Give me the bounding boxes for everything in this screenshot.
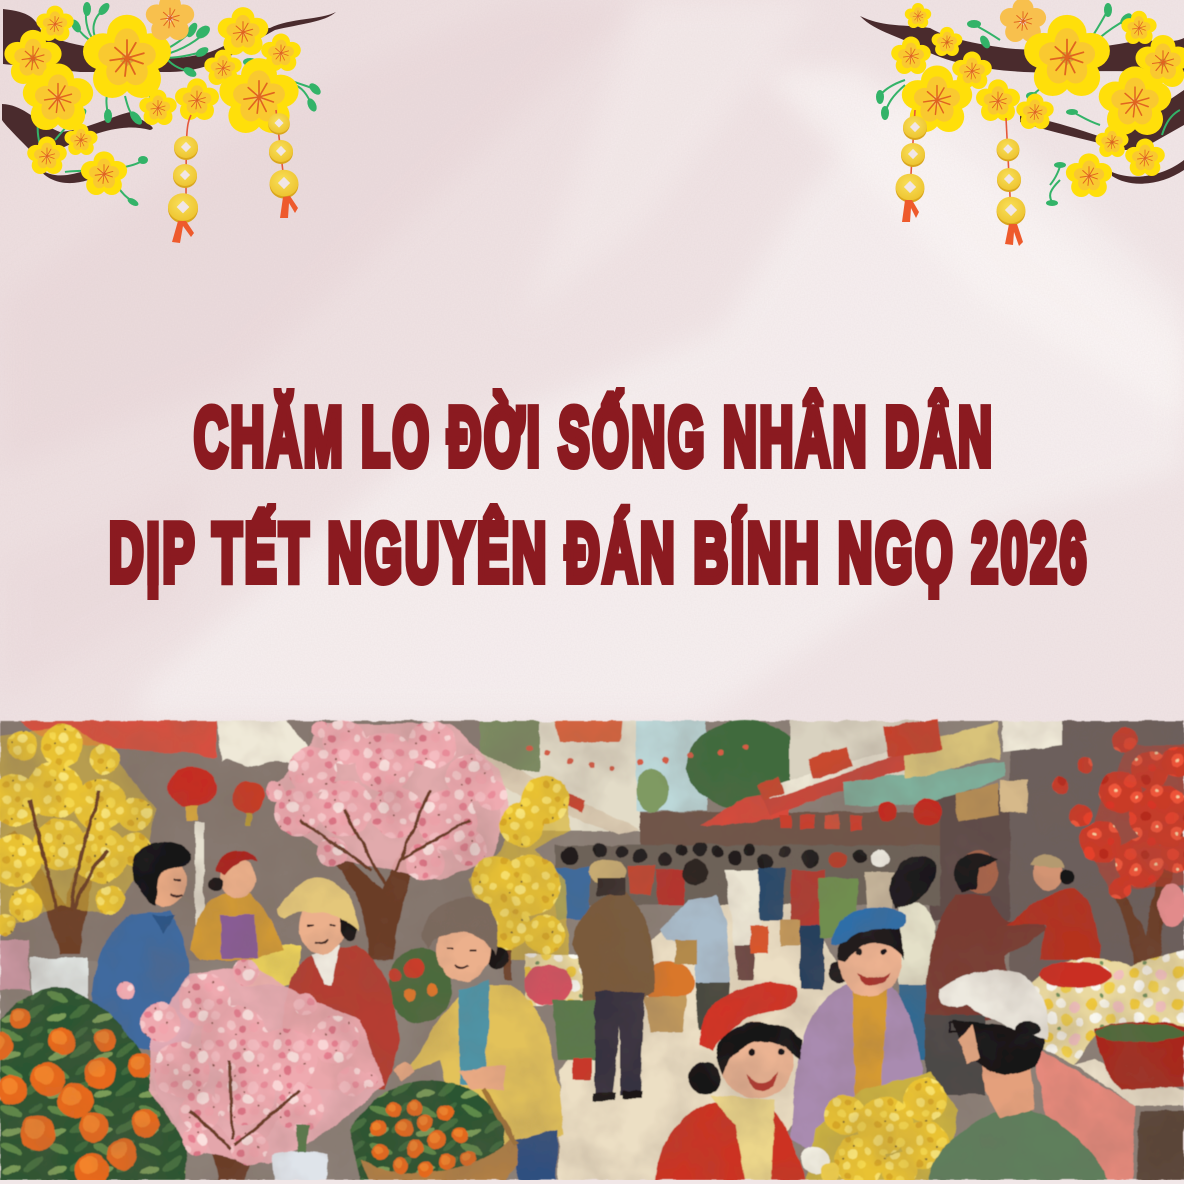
figure: man with white cap seen from behind	[928, 970, 1108, 1180]
pink peach tree centre	[265, 720, 510, 960]
distant lanterns and stalls	[470, 745, 748, 835]
yellow apricot tree centre right	[468, 776, 570, 980]
left awnings	[20, 721, 320, 925]
figure: woman with straw hat and red jacket	[277, 877, 400, 1090]
figure: girl with red beret	[655, 983, 805, 1180]
figure: person in light blue shirt	[660, 859, 730, 1030]
figure: woman in yellow jacket	[392, 898, 565, 1180]
green buds	[38, 8, 315, 202]
figure: man in blue shirt	[92, 842, 195, 1060]
title line 1: CHĂM LO ĐỜI SỐNG NHÂN DÂN	[194, 390, 995, 483]
title	[109, 390, 1089, 599]
right shop awnings and signs	[700, 719, 1062, 831]
title line 2: DỊP TẾT NGUYÊN ĐÁN BÍNH NGỌ 2026	[109, 505, 1089, 599]
crowd	[555, 843, 940, 990]
figure: man in brown jacket seen from behind	[572, 859, 655, 1101]
flower stall right	[1020, 950, 1184, 1180]
figure: woman in pale shirt and jeans	[890, 856, 936, 1060]
street and pavement	[558, 900, 860, 1180]
red peach tree right	[1052, 727, 1184, 1030]
red lanterns	[168, 767, 264, 826]
figure: vendor with red headscarf	[190, 851, 285, 960]
figure: man in maroon jacket	[925, 850, 1045, 1095]
flowers	[891, 0, 1184, 197]
bottom margin strip	[0, 1180, 1184, 1184]
yellow bouquet foreground	[801, 1072, 958, 1184]
branches	[860, 16, 1184, 184]
figure: woman with blue beret	[790, 908, 925, 1150]
flower baskets behind the figures	[240, 945, 694, 1080]
yellow apricot tree left	[0, 724, 155, 1005]
scene backdrop	[0, 720, 1184, 1180]
illustration: Tet flower market	[0, 719, 1184, 1184]
watercolor wash	[0, 721, 1184, 1180]
basket of oranges	[350, 1080, 518, 1180]
decoration: apricot blossom branch top left	[2, 0, 336, 243]
kumquat tree bottom left	[0, 987, 187, 1184]
flowers	[4, 0, 301, 195]
branches	[2, 9, 336, 183]
green buds	[880, 10, 1180, 202]
foreground pink peach branches	[117, 959, 385, 1180]
hanging coins	[168, 110, 298, 243]
decoration: apricot blossom branch top right	[860, 0, 1184, 246]
hanging coins	[896, 110, 1025, 246]
figure: vendor in red jacket	[1008, 854, 1100, 960]
